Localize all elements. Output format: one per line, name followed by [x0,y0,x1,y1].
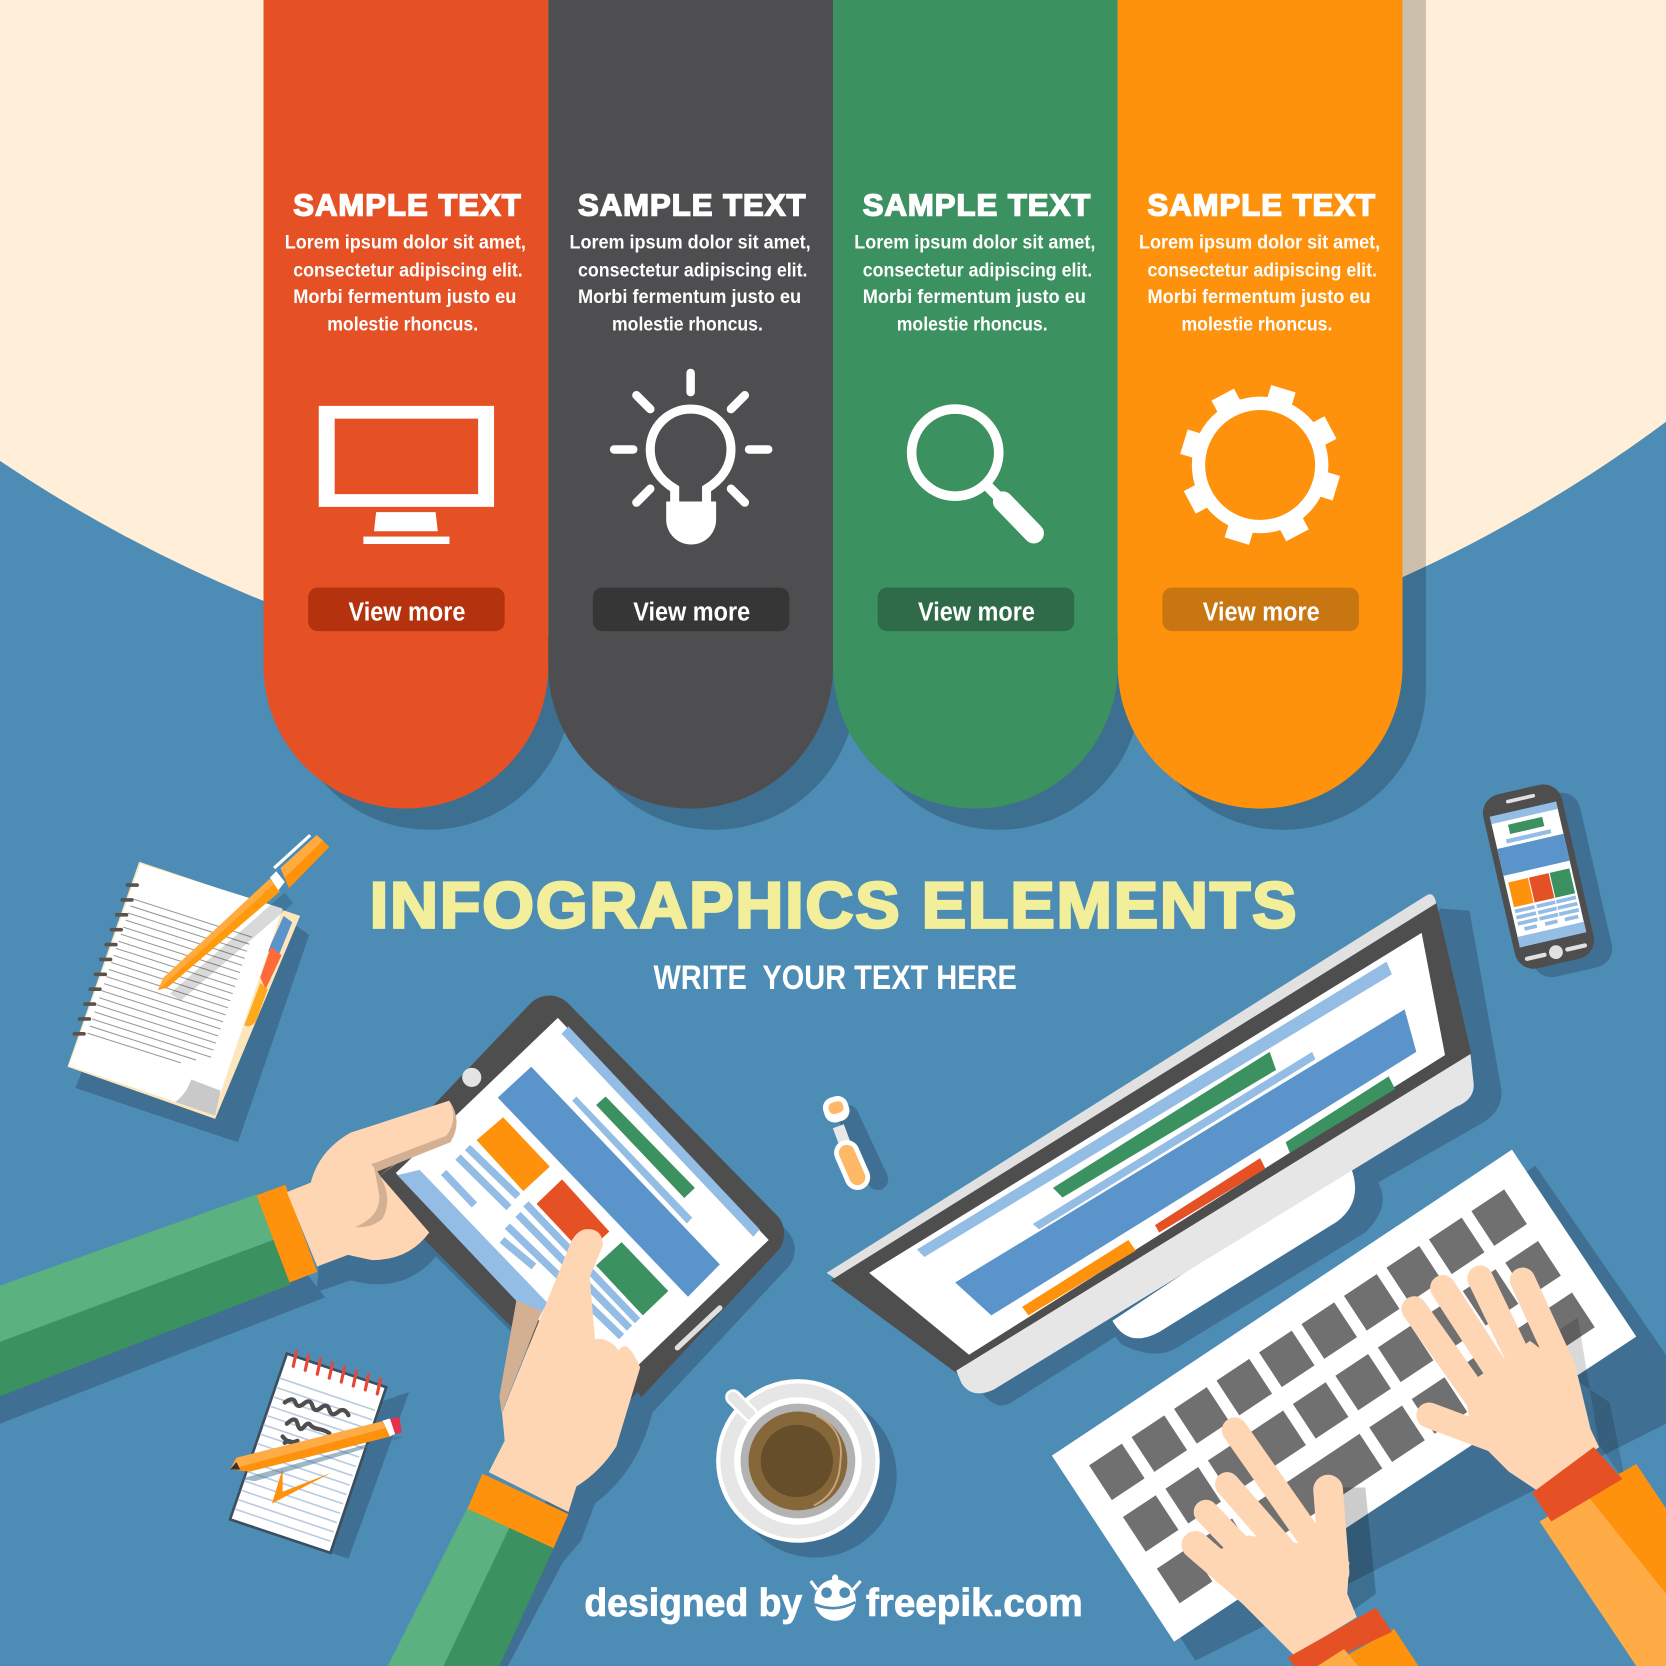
pointing arm shadow [468,1392,652,1666]
monitor and stand shadow [983,908,1502,1405]
subtitle: WRITE YOUR TEXT HERE [653,959,1017,997]
panel: green magnifier: consectetur adipiscing elit. [863,260,1092,281]
notebook with pen [67,835,329,1142]
panel: red monitor: molestie rhoncus. [327,314,478,335]
keyboard keys [1089,1189,1595,1603]
panel: red monitor: consectetur adipiscing elit. [293,260,523,281]
panel: dark bulb: Morbi fermentum justo eu [578,287,801,308]
tablet shadow [411,1038,768,1406]
pencil [230,1417,406,1481]
panel: orange gear: consectetur adipiscing elit. [1148,260,1377,281]
notebook spiral rings [74,885,137,1034]
panel: dark bulb: consectetur adipiscing elit. [578,260,808,281]
panel: orange gear: Morbi fermentum justo eu [1148,287,1371,308]
panel: green magnifier: Morbi fermentum justo eu [863,287,1086,308]
panel: red monitor [264,0,548,809]
button: view more orange: View more [1203,599,1320,627]
button: view more green: View more [918,599,1035,627]
pointing hand and sleeve [388,1229,640,1666]
panel: green magnifier: Lorem ipsum dolor sit amet, [854,233,1095,254]
typing hand lower with sleeve [1195,1430,1418,1666]
button: view more green [878,588,1074,631]
usb stick [820,1093,878,1179]
title: INFOGRAPHICS ELEMENTS [370,869,1297,941]
notebook tabs [244,916,292,1026]
panel: green magnifier: SAMPLE TEXT [863,188,1090,223]
coffee cup [716,1379,897,1558]
icon: magnifier [912,409,1034,533]
icon: gear [1180,385,1340,545]
notepad scribble [283,1399,348,1445]
panel: dark bulb: SAMPLE TEXT [578,188,806,223]
panel shadows [287,0,1426,830]
credit: designed by freepik: designed by [584,1581,802,1625]
button: view more dark: View more [633,599,750,627]
panel: red monitor: SAMPLE TEXT [293,188,521,223]
monitor stand [1112,1163,1355,1338]
phone [1479,781,1616,981]
panel: dark bulb: Lorem ipsum dolor sit amet, [570,233,811,254]
panel: orange gear: molestie rhoncus. [1182,314,1332,335]
button: view more orange [1162,588,1359,631]
left arm shadow [0,1220,325,1424]
panel: red monitor: Lorem ipsum dolor sit amet, [285,233,526,254]
icon: light bulb [614,373,768,545]
small notepad with pencil [230,1352,409,1559]
panel: red monitor: Morbi fermentum justo eu [293,287,516,308]
monitor screen content [917,962,1416,1315]
credit: designed by freepik: freepik.com [866,1581,1083,1625]
left palm shadow [317,1222,442,1292]
panel: green magnifier [833,0,1118,809]
button: view more red: View more [348,599,465,627]
icon: freepik robot [811,1575,861,1621]
monitor [827,894,1474,1393]
pen [158,835,329,1001]
panel: dark bulb [548,0,833,809]
keyboard [1052,1150,1666,1661]
tablet screen content [397,1026,760,1337]
tablet [396,1018,769,1393]
panel: orange gear: Lorem ipsum dolor sit amet, [1139,233,1380,254]
left hand and sleeve [0,1101,457,1396]
notepad rings [293,1352,380,1394]
panel: orange gear [1118,0,1402,809]
panel: green magnifier: molestie rhoncus. [897,314,1048,335]
typing hand upper with sleeve [1414,1278,1666,1666]
button: view more red [308,588,505,631]
panel: dark bulb: molestie rhoncus. [612,314,763,335]
credit: designed by freepik [584,1575,1083,1625]
icon: monitor [319,406,494,544]
orange check [272,1468,332,1503]
button: view more dark [593,588,789,631]
panel: orange gear: SAMPLE TEXT [1148,188,1375,223]
